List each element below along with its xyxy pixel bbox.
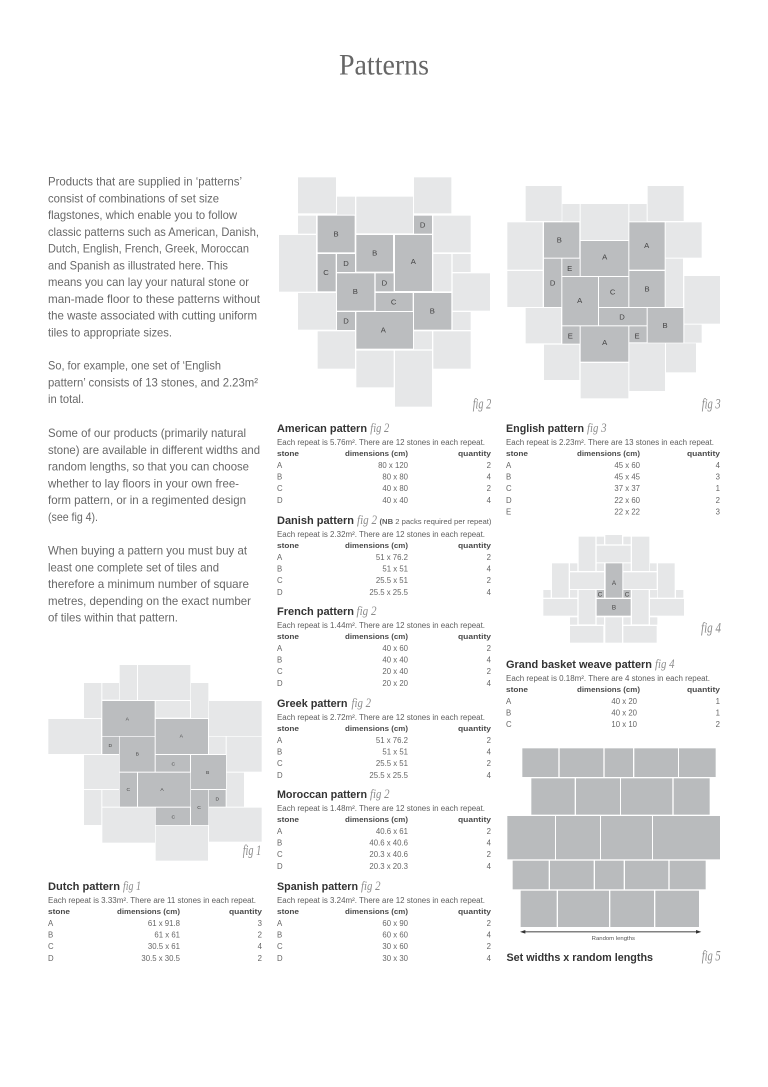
table: greek pattern: 2 — [487, 759, 491, 768]
table: moroccan pattern: 4 — [487, 862, 492, 871]
diagram: fig 4 grand basket weave: C — [625, 591, 630, 598]
diagram: fig 3 english pattern: B — [662, 321, 668, 330]
table: moroccan pattern: 2 — [487, 827, 491, 836]
table: moroccan pattern: Moroccan pattern — [277, 789, 367, 801]
table: dutch pattern — [48, 879, 263, 963]
table: english pattern: English pattern — [506, 423, 584, 435]
table: french pattern: Each repeat is 1.44m². There are 12 stones in each repeat. — [277, 621, 485, 630]
diagram: fig 4 grand basket weave — [543, 535, 684, 643]
table: dutch pattern: A — [48, 919, 54, 928]
table: danish pattern: 4 — [487, 564, 492, 574]
table: french pattern: 20 x 20 — [382, 679, 409, 688]
figure label: fig 5: fig 5 — [702, 948, 721, 964]
table: american pattern: quantity — [458, 449, 492, 458]
diagram: fig 3 english pattern: C — [610, 287, 616, 296]
table: grand basket weave pattern: C — [506, 720, 512, 729]
table: american pattern: A — [277, 461, 283, 470]
table: english pattern: 45 x 45 — [614, 472, 641, 482]
table: grand basket weave pattern: 40 x 20 — [611, 708, 638, 718]
table: american pattern: American pattern — [277, 423, 367, 435]
table: grand basket weave pattern — [506, 657, 721, 729]
table: danish pattern: Danish pattern — [277, 515, 354, 527]
diagram: fig 3 english pattern: E — [567, 264, 572, 273]
diagram: fig 2 american pattern — [279, 177, 490, 407]
table: french pattern: fig 2 — [356, 604, 376, 618]
table: moroccan pattern: stone — [277, 815, 299, 824]
table: american pattern: Each repeat is 5.76m². There are 12 stones in each repeat. — [277, 438, 485, 447]
diagram: fig 2 american pattern: B — [333, 230, 339, 239]
table: greek pattern: 25.5 x 51 — [376, 759, 408, 768]
table: english pattern: 3 — [716, 472, 720, 482]
diagram: fig 1 dutch pattern: B — [136, 752, 140, 758]
table: greek pattern: 4 — [487, 771, 492, 780]
table: danish pattern: quantity — [458, 541, 492, 550]
table: french pattern: 2 — [487, 667, 491, 676]
text block: introduction: stone) are available in different widths and — [48, 443, 260, 457]
text block: introduction: means you can lay your natural stone or — [48, 275, 249, 289]
diagram: fig 2 american pattern: C — [323, 268, 329, 277]
figure label: fig 1: fig 1 — [243, 843, 261, 859]
text block: introduction: form pattern, or in a regimented design — [48, 493, 246, 507]
title: Patterns — [339, 48, 429, 82]
table: french pattern: 4 — [487, 679, 492, 688]
table: french pattern: 2 — [487, 644, 491, 653]
table: grand basket weave pattern: 1 — [716, 708, 720, 718]
diagram: fig 3 english pattern: A — [644, 241, 650, 250]
table: dutch pattern: 61 x 91.8 — [148, 919, 180, 928]
table: american pattern: 4 — [487, 496, 492, 505]
table: english pattern: 37 x 37 — [614, 484, 640, 493]
diagram: fig 5 random lengths — [507, 748, 720, 942]
heading: set widths x random lengths: Set widths x random lengths — [506, 952, 653, 964]
table: french pattern: quantity — [458, 632, 492, 641]
table: english pattern: dimensions (cm) — [577, 449, 640, 458]
table: spanish pattern: dimensions (cm) — [345, 907, 408, 916]
text block: introduction: therefore a minimum number of square — [48, 577, 249, 591]
figure label: fig 3: fig 3 — [702, 396, 721, 412]
table: grand basket weave pattern: B — [506, 708, 511, 718]
table: grand basket weave pattern: quantity — [687, 685, 721, 694]
table: greek pattern: D — [277, 771, 283, 780]
table: greek pattern: C — [277, 759, 283, 768]
table: english pattern: 45 x 60 — [614, 461, 641, 470]
text block: introduction: flagstones, which enable you to follow — [48, 208, 237, 222]
table: danish pattern: 25.5 x 25.5 — [369, 588, 409, 597]
diagram: fig 1 dutch pattern: A — [180, 734, 184, 740]
diagram: fig 2 american pattern: C — [391, 298, 397, 307]
table: french pattern: D — [277, 679, 283, 688]
diagram: fig 4 grand basket weave: B — [612, 604, 616, 611]
table: french pattern — [277, 604, 492, 688]
text block: introduction: consist of combinations of set size — [48, 191, 219, 205]
table: moroccan pattern: C — [277, 850, 283, 859]
table: english pattern: 2 — [716, 496, 720, 505]
diagram: fig 3 english pattern: D — [550, 279, 556, 288]
table: french pattern: A — [277, 644, 283, 653]
diagram: fig 2 american pattern: D — [420, 221, 426, 230]
diagram: fig 3 english pattern — [507, 186, 720, 398]
table: dutch pattern: 2 — [258, 954, 262, 963]
table: english pattern: quantity — [687, 449, 721, 458]
table: dutch pattern: D — [48, 954, 54, 963]
text block: introduction: random lengths, so that you can choose — [48, 460, 249, 474]
table: dutch pattern: 4 — [258, 942, 263, 951]
table: french pattern: stone — [277, 632, 299, 641]
table: greek pattern: A — [277, 736, 283, 745]
table: moroccan pattern: fig 2 — [370, 787, 390, 801]
table: moroccan pattern: 2 — [487, 850, 491, 859]
table: spanish pattern: 30 x 30 — [382, 954, 409, 963]
table: french pattern: 40 x 40 — [382, 656, 409, 664]
table: dutch pattern: B — [48, 930, 53, 940]
text block: introduction: metres, depending on the exact number — [48, 594, 251, 608]
table: greek pattern: Greek pattern — [277, 698, 348, 710]
text block: introduction: When buying a pattern you must buy at — [48, 544, 248, 558]
diagram: fig 2 american pattern: D — [343, 317, 349, 326]
table: danish pattern: dimensions (cm) — [345, 541, 408, 550]
table: grand basket weave pattern: 10 x 10 — [611, 720, 638, 729]
diagram: fig 4 grand basket weave: A — [612, 580, 617, 587]
table: danish pattern: 2 — [487, 553, 491, 562]
table: dutch pattern: quantity — [229, 907, 263, 916]
diagram: fig 5 random lengths: Random lengths — [592, 936, 635, 942]
table: french pattern: 4 — [487, 656, 492, 664]
table: english pattern: A — [506, 461, 512, 470]
table: moroccan pattern: A — [277, 827, 283, 836]
table: danish pattern: C — [277, 576, 283, 585]
table: spanish pattern: 30 x 60 — [382, 942, 409, 951]
table: english pattern: C — [506, 484, 512, 493]
table: dutch pattern: 30.5 x 61 — [148, 942, 180, 951]
table: french pattern: French pattern — [277, 606, 354, 618]
table: spanish pattern: 4 — [487, 954, 492, 963]
table: american pattern — [277, 421, 492, 505]
diagram: fig 1 dutch pattern: C — [197, 805, 201, 811]
table: greek pattern: dimensions (cm) — [345, 724, 408, 733]
table: american pattern: 2 — [487, 484, 491, 493]
table: spanish pattern: C — [277, 942, 283, 951]
diagram: fig 2 american pattern: D — [382, 278, 388, 287]
table: spanish pattern: quantity — [458, 907, 492, 916]
diagram: fig 2 american pattern: B — [353, 287, 358, 296]
table: english pattern: E — [506, 508, 511, 516]
table: english pattern: stone — [506, 449, 528, 458]
table: danish pattern: Each repeat is 2.32m². There are 12 stones in each repeat. — [277, 530, 485, 539]
table: french pattern: dimensions (cm) — [345, 632, 408, 641]
table: grand basket weave pattern: 40 x 20 — [611, 697, 638, 706]
table: greek pattern: 51 x 51 — [382, 748, 408, 756]
text block: introduction: in total. — [48, 392, 84, 406]
table: danish pattern: A — [277, 553, 283, 562]
table: english pattern — [506, 421, 721, 516]
table: danish pattern: stone — [277, 541, 299, 550]
table: english pattern: 1 — [716, 484, 720, 493]
table: english pattern: 22 x 22 — [614, 508, 640, 516]
diagram: fig 3 english pattern: D — [619, 312, 625, 321]
table: danish pattern: (NB 2 packs required per repeat) — [380, 517, 492, 526]
table: greek pattern: 51 x 76.2 — [376, 736, 408, 745]
text block: introduction: of tiles within that pattern. — [48, 610, 178, 624]
table: moroccan pattern: 20.3 x 40.6 — [369, 850, 408, 859]
table: english pattern: D — [506, 496, 512, 505]
table: danish pattern — [277, 513, 492, 597]
diagram: fig 2 american pattern: A — [381, 326, 387, 335]
text block: introduction: pattern’ consists of 13 stones, and 2.23m² — [48, 376, 258, 390]
table: moroccan pattern: B — [277, 838, 282, 848]
table: american pattern: dimensions (cm) — [345, 449, 408, 458]
table: greek pattern: stone — [277, 724, 299, 733]
text block: introduction: Some of our products (primarily natural — [48, 426, 246, 440]
text block: introduction — [47, 174, 261, 624]
text block: introduction: and Spanish as illustrated here. This — [48, 258, 228, 272]
diagram: fig 2 american pattern: A — [411, 257, 417, 266]
text block: introduction: the waste associated with cutting uniform — [48, 309, 257, 323]
text block: introduction: man-made floor to these patterns without — [48, 292, 261, 306]
table: dutch pattern: 61 x 61 — [154, 930, 180, 940]
table: spanish pattern: D — [277, 954, 283, 963]
table: american pattern: 80 x 80 — [382, 472, 409, 482]
diagram: fig 3 english pattern: A — [602, 253, 608, 262]
table: american pattern: D — [277, 496, 283, 505]
table: grand basket weave pattern: A — [506, 697, 512, 706]
table: dutch pattern: stone — [48, 907, 70, 916]
table: english pattern: B — [506, 472, 511, 482]
table: dutch pattern: Dutch pattern — [48, 881, 120, 893]
text block: introduction: tiles to appropriate sizes. — [48, 325, 172, 339]
table: grand basket weave pattern: dimensions (cm) — [577, 685, 640, 694]
diagram: fig 3 english pattern: E — [568, 331, 573, 340]
table: moroccan pattern: 4 — [487, 838, 492, 848]
table: greek pattern: Each repeat is 2.72m². There are 12 stones in each repeat. — [277, 713, 485, 722]
diagram: fig 2 american pattern: B — [430, 306, 435, 315]
table: dutch pattern: fig 1 — [123, 879, 141, 893]
table: greek pattern: quantity — [458, 724, 492, 733]
table: spanish pattern: Each repeat is 3.24m². There are 12 stones in each repeat. — [277, 896, 485, 905]
table: danish pattern: 51 x 51 — [382, 564, 408, 574]
table: moroccan pattern: Each repeat is 1.48m². There are 12 stones in each repeat. — [277, 804, 485, 813]
table: greek pattern: 2 — [487, 736, 491, 745]
table: greek pattern: fig 2 — [352, 696, 371, 710]
table: english pattern: 22 x 60 — [614, 496, 641, 505]
table: spanish pattern: fig 2 — [361, 879, 380, 893]
table: american pattern: fig 2 — [370, 421, 389, 435]
text block: introduction: Dutch, English, French, Greek, Moroccan — [48, 242, 249, 256]
table: danish pattern: D — [277, 588, 283, 597]
table: american pattern: 2 — [487, 461, 491, 470]
text block: introduction: classic patterns such as American, Danish, — [48, 225, 259, 239]
diagram: fig 1 dutch pattern: A — [160, 787, 164, 793]
table: french pattern: B — [277, 656, 282, 664]
table: spanish pattern: A — [277, 919, 283, 928]
table: spanish pattern: B — [277, 930, 282, 940]
diagram: fig 3 english pattern: A — [577, 296, 583, 305]
diagram: fig 1 dutch pattern: A — [126, 716, 130, 722]
text block: introduction: So, for example, one set of ‘English — [48, 359, 221, 373]
text block: introduction: least one complete set of tiles and — [48, 560, 219, 574]
table: grand basket weave pattern: Grand basket weave pattern — [506, 659, 652, 671]
figure label: fig 4: fig 4 — [701, 620, 721, 636]
table: spanish pattern — [277, 879, 492, 963]
table: danish pattern: 25.5 x 51 — [376, 576, 408, 585]
table: french pattern: 40 x 60 — [382, 644, 409, 653]
table: american pattern: stone — [277, 449, 299, 458]
table: spanish pattern: 4 — [487, 930, 492, 940]
table: dutch pattern: 30.5 x 30.5 — [141, 954, 181, 963]
diagram: fig 1 dutch pattern: C — [127, 787, 131, 793]
table: greek pattern — [277, 696, 492, 780]
table: spanish pattern: 60 x 60 — [382, 930, 409, 940]
diagram: fig 1 dutch pattern: C — [172, 814, 176, 820]
table: spanish pattern: Spanish pattern — [277, 881, 358, 893]
figure label: fig 2: fig 2 — [473, 396, 491, 412]
table: grand basket weave pattern: stone — [506, 685, 528, 694]
table: grand basket weave pattern: Each repeat is 0.18m². There are 4 stones in each repeat. — [506, 674, 710, 683]
table: english pattern: 3 — [716, 508, 720, 516]
table: moroccan pattern: quantity — [458, 815, 492, 824]
diagram: fig 2 american pattern: D — [343, 259, 349, 268]
diagram: fig 1 dutch pattern — [48, 665, 262, 861]
diagram: fig 4 grand basket weave: C — [598, 591, 603, 598]
table: american pattern: 40 x 80 — [382, 484, 409, 493]
table: grand basket weave pattern: 2 — [716, 720, 720, 729]
table: spanish pattern: 2 — [487, 942, 491, 951]
table: english pattern: Each repeat is 2.23m². There are 13 stones in each repeat. — [506, 438, 714, 447]
diagram: fig 1 dutch pattern: C — [172, 762, 176, 768]
table: danish pattern: B — [277, 564, 282, 574]
table: moroccan pattern: dimensions (cm) — [345, 815, 408, 824]
text block: introduction: Products that are supplied in ‘patterns’ — [48, 174, 242, 188]
diagram: fig 2 american pattern: B — [372, 249, 377, 258]
table: spanish pattern: 60 x 90 — [382, 919, 409, 928]
table: american pattern: 40 x 40 — [382, 496, 409, 505]
diagram: fig 3 english pattern: E — [634, 331, 640, 340]
table: american pattern: C — [277, 484, 283, 493]
table: english pattern: 4 — [716, 461, 721, 470]
table: danish pattern: 4 — [487, 588, 492, 597]
table: grand basket weave pattern: 1 — [716, 697, 720, 706]
table: greek pattern: 25.5 x 25.5 — [369, 771, 409, 780]
table: greek pattern: B — [277, 748, 282, 756]
table: moroccan pattern — [277, 787, 492, 871]
table: dutch pattern: C — [48, 942, 54, 951]
diagram: fig 1 dutch pattern: D — [216, 796, 220, 802]
table: spanish pattern: stone — [277, 907, 299, 916]
table: moroccan pattern: D — [277, 862, 283, 871]
diagram: fig 1 dutch pattern: D — [109, 743, 113, 749]
table: danish pattern: 51 x 76.2 — [376, 553, 408, 562]
diagram: fig 1 dutch pattern: B — [206, 770, 210, 776]
text block: introduction: whether to lay floors in your own free- — [47, 476, 239, 490]
table: french pattern: 20 x 40 — [382, 667, 409, 676]
diagram: fig 3 english pattern: B — [557, 236, 562, 245]
table: dutch pattern: Each repeat is 3.33m². There are 11 stones in each repeat. — [48, 896, 256, 905]
table: moroccan pattern: 20.3 x 20.3 — [369, 862, 408, 871]
table: moroccan pattern: 40.6 x 40.6 — [369, 838, 408, 848]
table: moroccan pattern: 40.6 x 61 — [376, 827, 408, 836]
table: spanish pattern: 2 — [487, 919, 491, 928]
table: english pattern: fig 3 — [587, 421, 606, 435]
table: grand basket weave pattern: fig 4 — [655, 657, 674, 671]
table: danish pattern: fig 2 — [357, 513, 377, 527]
table: greek pattern: 4 — [487, 748, 492, 756]
text block: introduction: (see fig 4). — [48, 510, 98, 524]
table: danish pattern: 2 — [487, 576, 491, 585]
table: american pattern: 4 — [487, 472, 492, 482]
table: french pattern: C — [277, 667, 283, 676]
diagram: fig 3 english pattern: B — [644, 284, 650, 293]
table: dutch pattern: 3 — [258, 919, 262, 928]
diagram: fig 3 english pattern: A — [602, 338, 608, 347]
table: dutch pattern: dimensions (cm) — [117, 907, 180, 916]
table: dutch pattern: 2 — [258, 930, 262, 940]
table: american pattern: B — [277, 472, 282, 482]
table: american pattern: 80 x 120 — [378, 461, 409, 470]
